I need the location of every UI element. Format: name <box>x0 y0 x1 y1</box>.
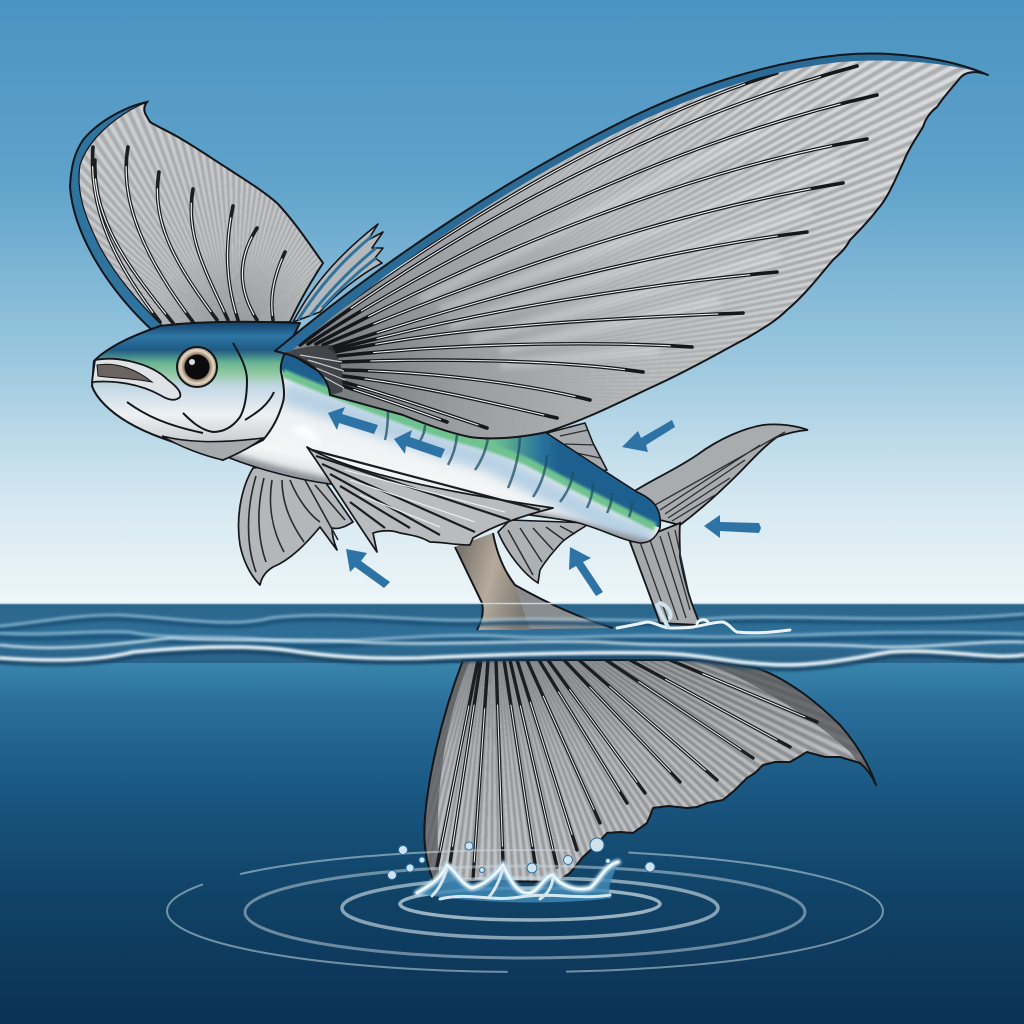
small fin behind main wing <box>547 423 607 472</box>
fish body <box>228 354 662 544</box>
fish head <box>92 322 300 460</box>
sky background <box>0 0 1024 604</box>
upper tail lobe <box>633 424 808 525</box>
arrow: tail gap <box>622 420 675 452</box>
arrow: over body middle <box>394 430 445 458</box>
upper lip <box>92 359 180 400</box>
dorsal fin <box>293 224 383 322</box>
ripples on the water surface <box>167 850 883 972</box>
gill cover lines <box>127 343 274 433</box>
arrow: below rear fin <box>569 547 603 596</box>
splash at fin tip <box>388 838 655 902</box>
lower tail lobe upper part <box>630 523 700 625</box>
splash where lower lobe meets surface <box>617 603 790 633</box>
arrow: over body front <box>328 407 378 434</box>
tail stalk above water <box>455 533 613 630</box>
lower tail lobe underwater <box>423 659 877 883</box>
rear ventral fin <box>498 520 590 583</box>
sea background <box>0 660 1024 1024</box>
far pectoral fin <box>69 100 324 329</box>
waves at surface <box>0 604 1024 669</box>
gill flap <box>162 436 263 460</box>
arrow: behind tail <box>704 515 761 538</box>
mouth opening <box>97 364 152 382</box>
main pectoral wing <box>274 52 989 440</box>
arrow: below front fin <box>346 549 390 588</box>
sea surface band <box>0 603 1024 663</box>
airflow arrows <box>328 407 761 596</box>
eye <box>177 347 217 387</box>
near pelvic fin <box>307 447 553 552</box>
lower pectoral fin <box>239 460 353 585</box>
